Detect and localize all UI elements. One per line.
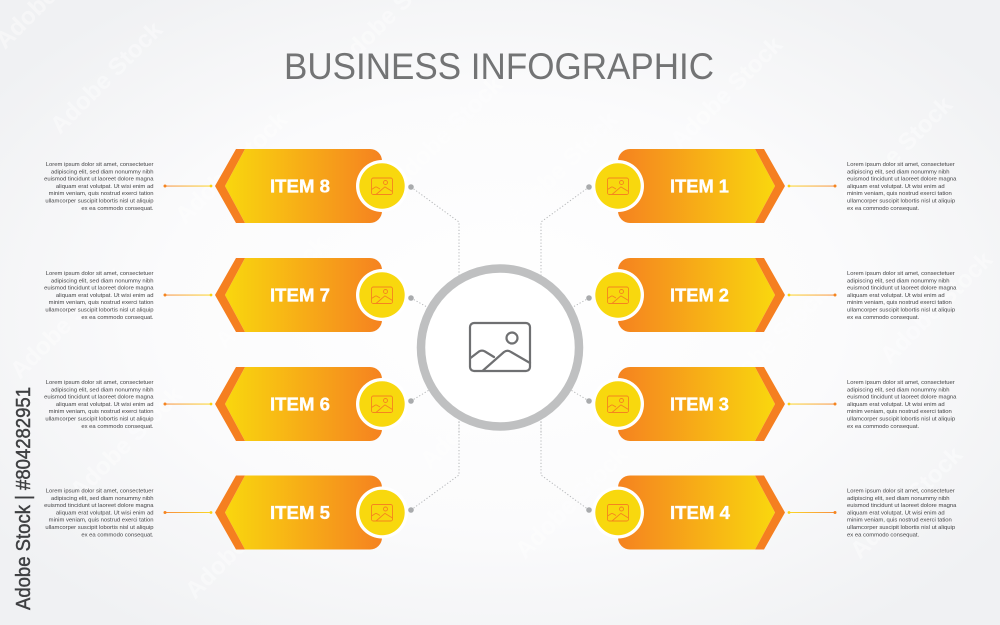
icon: item 3 bbox=[608, 396, 628, 412]
item 5: ullamcorper suscipit lobortis nisl ut aliquip bbox=[45, 525, 154, 531]
item 7: ex ea commodo consequat. bbox=[81, 315, 154, 321]
stock id: Adobe Stock | #804282951 bbox=[12, 387, 35, 610]
item 1: aliquam erat volutpat. Ut wisi enim ad bbox=[847, 184, 945, 190]
item 4 bbox=[592, 476, 957, 550]
item 8: ex ea commodo consequat. bbox=[81, 206, 154, 212]
item 6: ex ea commodo consequat. bbox=[81, 424, 154, 430]
item 2: aliquam erat volutpat. Ut wisi enim ad bbox=[847, 293, 945, 299]
watermarks: Adobe Stock bbox=[5, 261, 128, 384]
item 7: Lorem ipsum dolor sit amet, consectetuer bbox=[46, 271, 154, 277]
item 8 bbox=[44, 149, 408, 223]
item 7: minim veniam, quis nostrud exerci tation bbox=[49, 300, 154, 306]
item 7: euismod tincidunt ut laoreet dolore magna bbox=[44, 286, 154, 292]
item 1: minim veniam, quis nostrud exerci tation bbox=[847, 191, 952, 197]
icon: item 6 bbox=[372, 396, 392, 412]
item 3: euismod tincidunt ut laoreet dolore magna bbox=[847, 395, 957, 401]
item 7: ITEM 7 bbox=[270, 286, 330, 306]
watermarks: Adobe Stock bbox=[510, 441, 633, 564]
item 2: Lorem ipsum dolor sit amet, consectetuer bbox=[847, 271, 955, 277]
central ring bbox=[421, 268, 579, 426]
item 2: ullamcorper suscipit lobortis nisl ut aliquip bbox=[847, 308, 956, 314]
watermarks: Adobe Stock bbox=[170, 106, 293, 229]
item 2: euismod tincidunt ut laoreet dolore magna bbox=[847, 286, 957, 292]
item 6: Lorem ipsum dolor sit amet, consectetuer bbox=[46, 380, 154, 386]
item 1: Lorem ipsum dolor sit amet, consectetuer bbox=[847, 162, 955, 168]
item 7: ullamcorper suscipit lobortis nisl ut aliquip bbox=[45, 308, 154, 314]
item 3: ex ea commodo consequat. bbox=[847, 424, 920, 430]
item 2 bbox=[592, 258, 957, 332]
icon: item 4 bbox=[608, 504, 628, 521]
icon: item 5 bbox=[372, 504, 392, 521]
item 3: adipiscing elit, sed diam nonummy nibh bbox=[847, 387, 950, 393]
item 7: aliquam erat volutpat. Ut wisi enim ad bbox=[56, 293, 154, 299]
title: BUSINESS INFOGRAPHIC bbox=[284, 45, 714, 87]
item 3: aliquam erat volutpat. Ut wisi enim ad bbox=[847, 402, 945, 408]
item 8: ullamcorper suscipit lobortis nisl ut aliquip bbox=[45, 198, 154, 204]
item 2: ex ea commodo consequat. bbox=[847, 315, 920, 321]
item 4: euismod tincidunt ut laoreet dolore magna bbox=[847, 503, 957, 509]
item 3: Lorem ipsum dolor sit amet, consectetuer bbox=[847, 380, 955, 386]
icon: central image bbox=[470, 323, 530, 371]
item 6: aliquam erat volutpat. Ut wisi enim ad bbox=[56, 402, 154, 408]
item 6: euismod tincidunt ut laoreet dolore magna bbox=[44, 395, 154, 401]
item 1: ex ea commodo consequat. bbox=[847, 206, 920, 212]
item 5: aliquam erat volutpat. Ut wisi enim ad bbox=[56, 510, 154, 516]
icon: item 8 bbox=[372, 178, 392, 194]
item 5: minim veniam, quis nostrud exerci tation bbox=[49, 518, 154, 524]
watermarks: Adobe Stock bbox=[45, 16, 168, 139]
watermarks: Adobe Stock bbox=[65, 381, 188, 504]
item 1 bbox=[592, 149, 957, 223]
item 7 bbox=[44, 258, 408, 332]
item 8: Lorem ipsum dolor sit amet, consectetuer bbox=[46, 162, 154, 168]
item 1: ITEM 1 bbox=[670, 176, 729, 196]
watermarks: Adobe Stock bbox=[835, 91, 958, 214]
item 8: ITEM 8 bbox=[270, 176, 330, 196]
watermarks: Adobe Stock bbox=[500, 106, 623, 229]
item 5: euismod tincidunt ut laoreet dolore magna bbox=[44, 503, 154, 509]
item 7: adipiscing elit, sed diam nonummy nibh bbox=[51, 278, 154, 284]
item 8: aliquam erat volutpat. Ut wisi enim ad bbox=[56, 184, 154, 190]
item 3: minim veniam, quis nostrud exerci tation bbox=[847, 409, 952, 415]
item 6: ITEM 6 bbox=[270, 394, 330, 414]
item 3: ullamcorper suscipit lobortis nisl ut aliquip bbox=[847, 416, 956, 422]
item 3: ITEM 3 bbox=[670, 394, 729, 414]
item 4: ullamcorper suscipit lobortis nisl ut aliquip bbox=[847, 525, 956, 531]
item 4: ITEM 4 bbox=[670, 503, 730, 523]
item 2: ITEM 2 bbox=[670, 286, 729, 306]
item 5: ex ea commodo consequat. bbox=[81, 532, 154, 538]
item 1: adipiscing elit, sed diam nonummy nibh bbox=[847, 169, 950, 175]
item 2: minim veniam, quis nostrud exerci tation bbox=[847, 300, 952, 306]
item 6: adipiscing elit, sed diam nonummy nibh bbox=[51, 387, 154, 393]
item 1: ullamcorper suscipit lobortis nisl ut aliquip bbox=[847, 198, 956, 204]
item 5 bbox=[44, 476, 408, 550]
item 3 bbox=[592, 367, 957, 441]
item 4: minim veniam, quis nostrud exerci tation bbox=[847, 518, 952, 524]
watermarks: Adobe Stock bbox=[415, 351, 538, 474]
item 5: adipiscing elit, sed diam nonummy nibh bbox=[51, 496, 154, 502]
watermarks: Adobe Stock bbox=[845, 441, 968, 564]
item 4: adipiscing elit, sed diam nonummy nibh bbox=[847, 496, 950, 502]
watermarks: Adobe Stock bbox=[180, 481, 303, 604]
watermarks: Adobe Stock bbox=[385, 71, 508, 194]
icon: item 1 bbox=[608, 178, 628, 194]
icon: item 7 bbox=[372, 287, 392, 304]
watermarks: Adobe Stock bbox=[875, 246, 998, 369]
dotted connectors bbox=[408, 184, 592, 513]
item 6: minim veniam, quis nostrud exerci tation bbox=[49, 409, 154, 415]
item 8: euismod tincidunt ut laoreet dolore magna bbox=[44, 177, 154, 183]
item 4: ex ea commodo consequat. bbox=[847, 532, 920, 538]
watermarks: Adobe Stock bbox=[710, 281, 833, 404]
item 6: ullamcorper suscipit lobortis nisl ut aliquip bbox=[45, 416, 154, 422]
item 1: euismod tincidunt ut laoreet dolore magna bbox=[847, 177, 957, 183]
item 4: aliquam erat volutpat. Ut wisi enim ad bbox=[847, 510, 945, 516]
item 5: Lorem ipsum dolor sit amet, consectetuer bbox=[46, 488, 154, 494]
icon: item 2 bbox=[608, 287, 628, 304]
watermarks: Adobe Stock bbox=[665, 31, 788, 154]
item 8: minim veniam, quis nostrud exerci tation bbox=[49, 191, 154, 197]
item 2: adipiscing elit, sed diam nonummy nibh bbox=[847, 278, 950, 284]
item 4: Lorem ipsum dolor sit amet, consectetuer bbox=[847, 488, 955, 494]
watermarks: Adobe Stock bbox=[210, 231, 333, 354]
item 5: ITEM 5 bbox=[270, 503, 330, 523]
item 8: adipiscing elit, sed diam nonummy nibh bbox=[51, 169, 154, 175]
item 6 bbox=[44, 367, 408, 441]
watermarks: Adobe Stock bbox=[540, 241, 663, 364]
